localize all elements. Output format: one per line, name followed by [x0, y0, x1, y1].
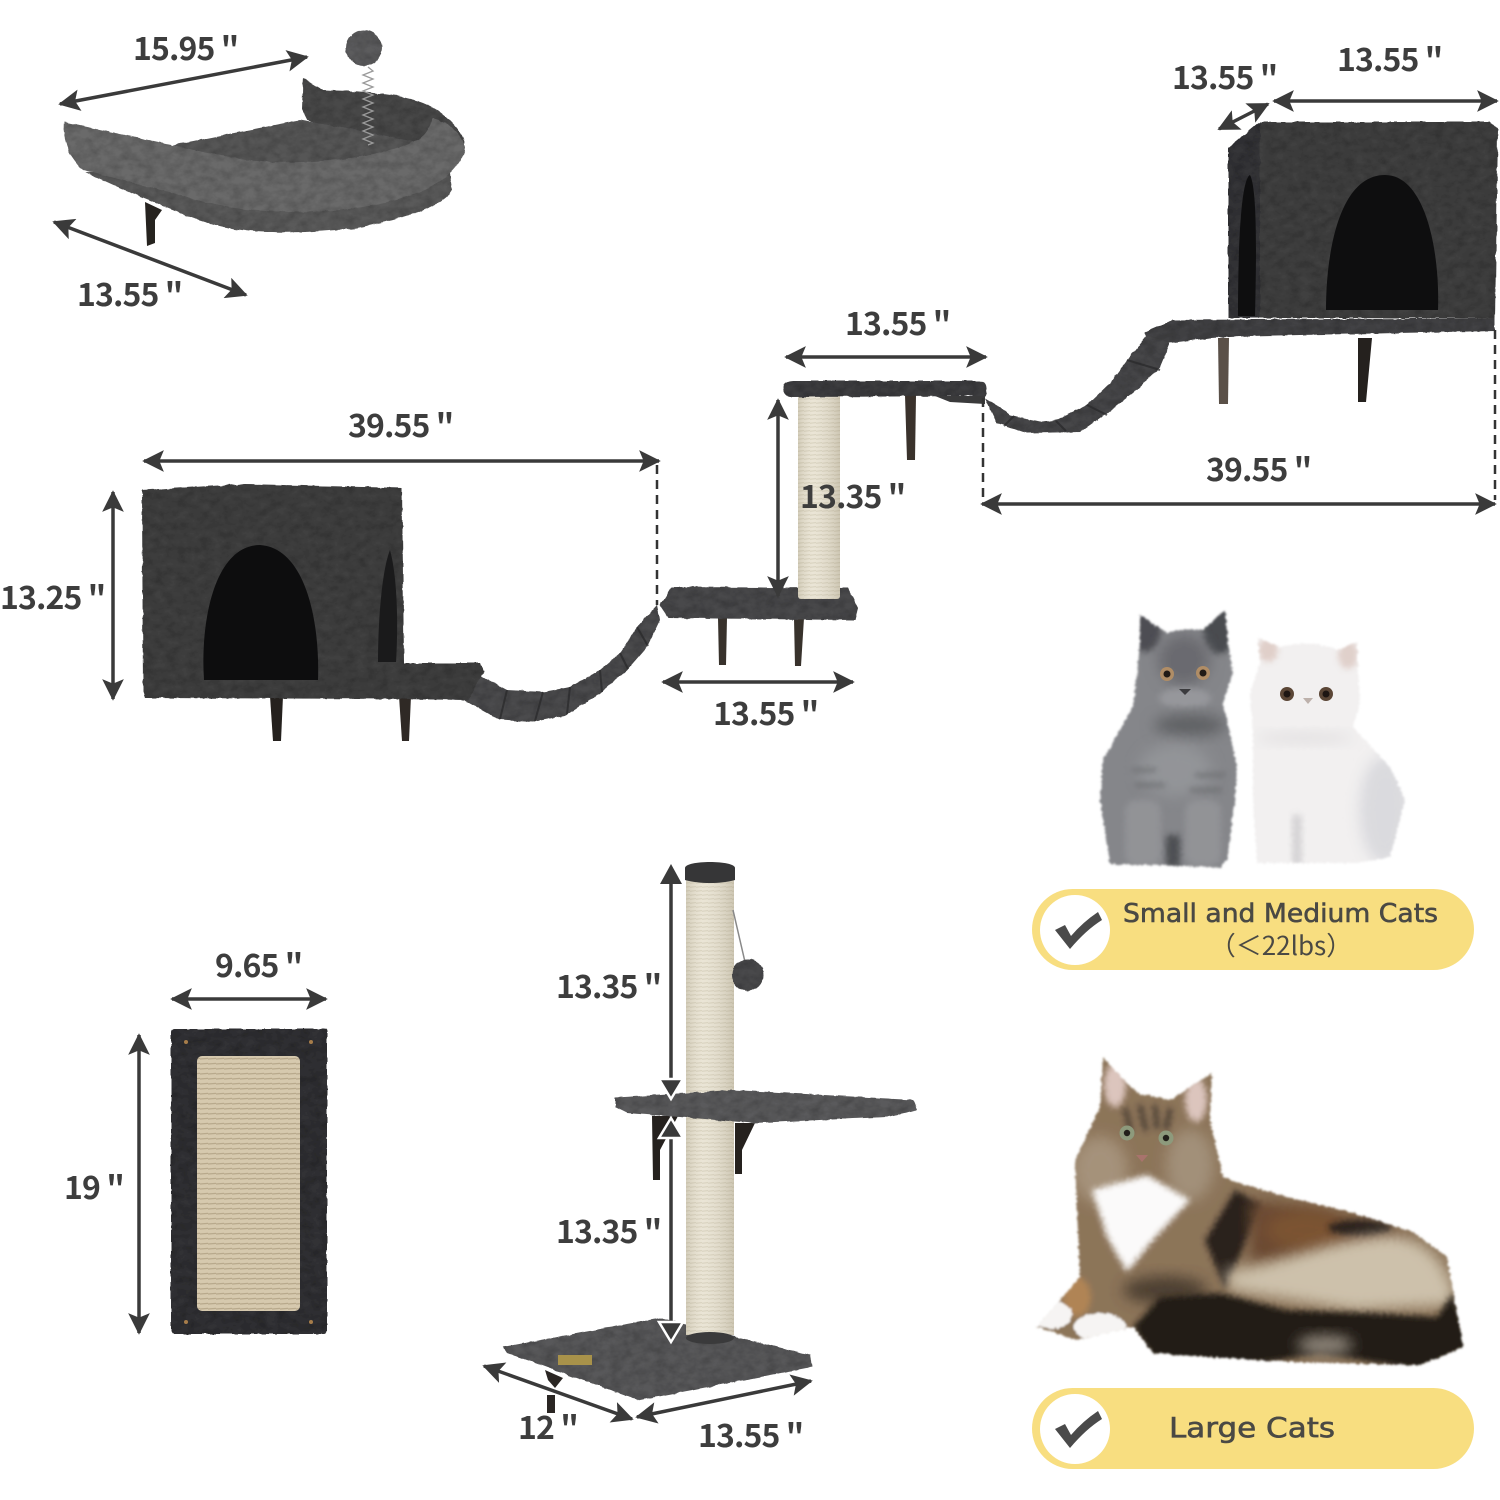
dimension: left span 39.55: 39.55 ": [348, 401, 453, 447]
white kitten eyes: [1280, 687, 1333, 704]
badge: small and medium cats: [1032, 889, 1474, 970]
grey kitten eyes: [1160, 666, 1210, 695]
dimension: bed depth 13.55: 13.55 ": [77, 270, 182, 316]
cat tree product: [503, 862, 917, 1413]
photo: white kitten: [1250, 638, 1406, 864]
icon: check mark: [1040, 895, 1110, 965]
dimension: base depth 12: [484, 1366, 632, 1449]
dimension: bed depth 13.55: [54, 222, 246, 316]
dimension: lower post 13.35: 13.35 ": [556, 1207, 661, 1253]
lower left cat house with ladder: [142, 484, 660, 741]
badge: large cats: Large Cats: [1169, 1411, 1335, 1444]
badge: small and medium cats: （＜22lbs）: [1210, 926, 1352, 963]
dimension: pad height 19: 19 ": [64, 1163, 124, 1209]
cat bed product: [64, 30, 465, 246]
dimension: upper post 13.35: 13.35 ": [556, 962, 661, 1008]
dimension: upper post 13.35: [556, 864, 683, 1099]
dimensions: house depth and width 13.55: 13.55 ": [1172, 53, 1277, 99]
dimension: top platform 13.55: 13.55 ": [845, 299, 950, 345]
base: [503, 1318, 812, 1400]
dimensions: house depth and width 13.55: 13.55 ": [1337, 35, 1442, 81]
badge: large cats: [1032, 1388, 1474, 1469]
badge: small and medium cats: Small and Medium Cats: [1123, 899, 1438, 929]
pom ball: [346, 30, 382, 66]
photo: grey kitten: [1098, 610, 1238, 870]
spring: [363, 67, 373, 145]
bracket: [145, 202, 162, 246]
base brackets: [545, 1370, 563, 1413]
dimension: pad width 9.65: 9.65 ": [215, 941, 302, 987]
dimension: base width 13.55: 13.55 ": [698, 1411, 803, 1457]
icon: check mark: [1040, 1394, 1110, 1464]
middle platform: [615, 1090, 917, 1123]
upper right cat house with ladder: [985, 122, 1498, 433]
dimension: base depth 12: 12 ": [518, 1403, 578, 1449]
tabby cat eyes and nose: [1120, 1126, 1174, 1162]
post: [686, 870, 734, 1335]
dimension: lower platform 13.55: 13.55 ": [713, 689, 818, 735]
hanging toy: [733, 910, 745, 962]
dimension: bed width 15.95: [60, 24, 307, 104]
dimensions: house depth and width 13.55: [1172, 35, 1497, 129]
dimension: base width 13.55: [637, 1381, 811, 1457]
dimension: post height 13.35: 13.35 ": [800, 472, 905, 518]
wall brackets: [652, 1116, 678, 1180]
photo: large tabby cat: [1030, 1050, 1470, 1380]
middle scratching post platform: [660, 381, 987, 666]
scratching pad product: [171, 1029, 327, 1334]
dimension: bed width 15.95: 15.95 ": [133, 24, 238, 70]
dimension: house height 13.25: 13.25 ": [0, 573, 105, 619]
dimension: right span 39.55: 39.55 ": [1206, 445, 1311, 491]
dimension: lower post 13.35: [556, 1118, 683, 1342]
